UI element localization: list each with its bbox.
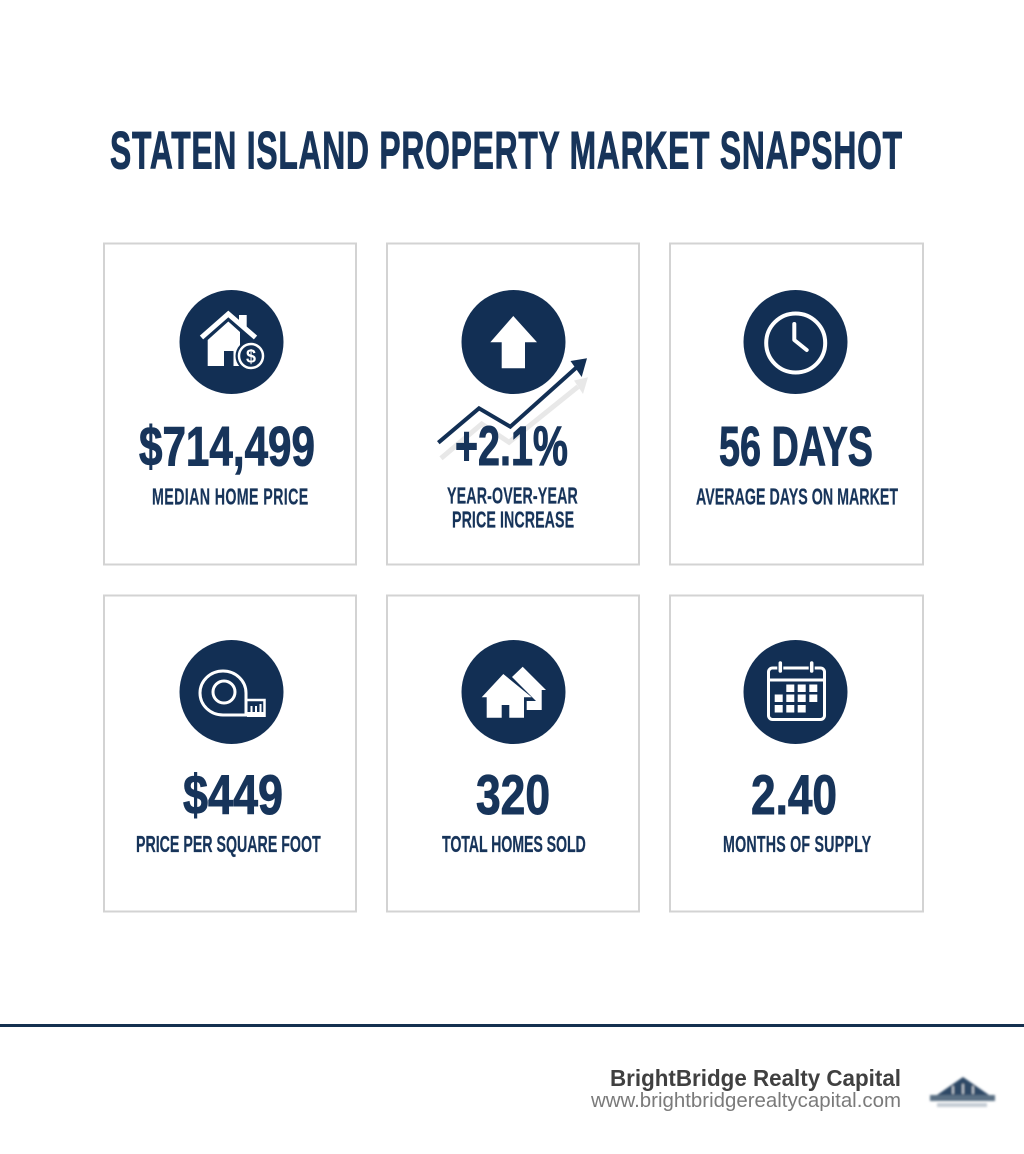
icon: house with dollar coin: [180, 290, 284, 394]
label: PRICE PER SQUARE FOOT: [136, 833, 321, 858]
panel: year-over-year price increase: [387, 244, 639, 564]
trend arrow shadow: [441, 377, 588, 458]
panel: total homes sold: [387, 596, 639, 912]
value: +2.1%: [455, 414, 568, 477]
icon: house with dollar coin: $: [246, 346, 256, 366]
panel: median home price: [104, 244, 356, 564]
value: 56 DAYS: [719, 414, 873, 478]
footer company name: BrightBridge Realty Capital: [610, 1065, 901, 1091]
icon: up arrow: [462, 290, 566, 394]
title: STATEN ISLAND PROPERTY MARKET SNAPSHOT: [110, 121, 902, 181]
panel: price per square foot: [104, 596, 356, 912]
icon: clock: [744, 290, 848, 394]
label: [447, 484, 578, 534]
footer logo: [930, 1077, 995, 1107]
footer website: www.brightbridgerealtycapital.com: [590, 1090, 901, 1112]
panel: average days on market: [670, 244, 923, 564]
label: AVERAGE DAYS ON MARKET: [696, 485, 898, 511]
label: MEDIAN HOME PRICE: [152, 485, 308, 511]
label: PRICE INCREASE: [452, 508, 574, 534]
label: MONTHS OF SUPPLY: [723, 833, 871, 858]
value: $449: [183, 763, 283, 826]
icon: tape measure: [180, 640, 284, 744]
label: YEAR-OVER-YEAR: [447, 484, 578, 510]
trend arrow: [438, 358, 587, 443]
icon: two houses: [462, 640, 566, 744]
footer rule: [0, 1024, 1024, 1027]
value: 320: [476, 763, 550, 826]
value: $714,499: [139, 414, 315, 478]
label: TOTAL HOMES SOLD: [442, 833, 586, 858]
value: 2.40: [751, 763, 837, 826]
icon: calendar: [744, 640, 848, 744]
panel: months of supply: [670, 596, 923, 912]
